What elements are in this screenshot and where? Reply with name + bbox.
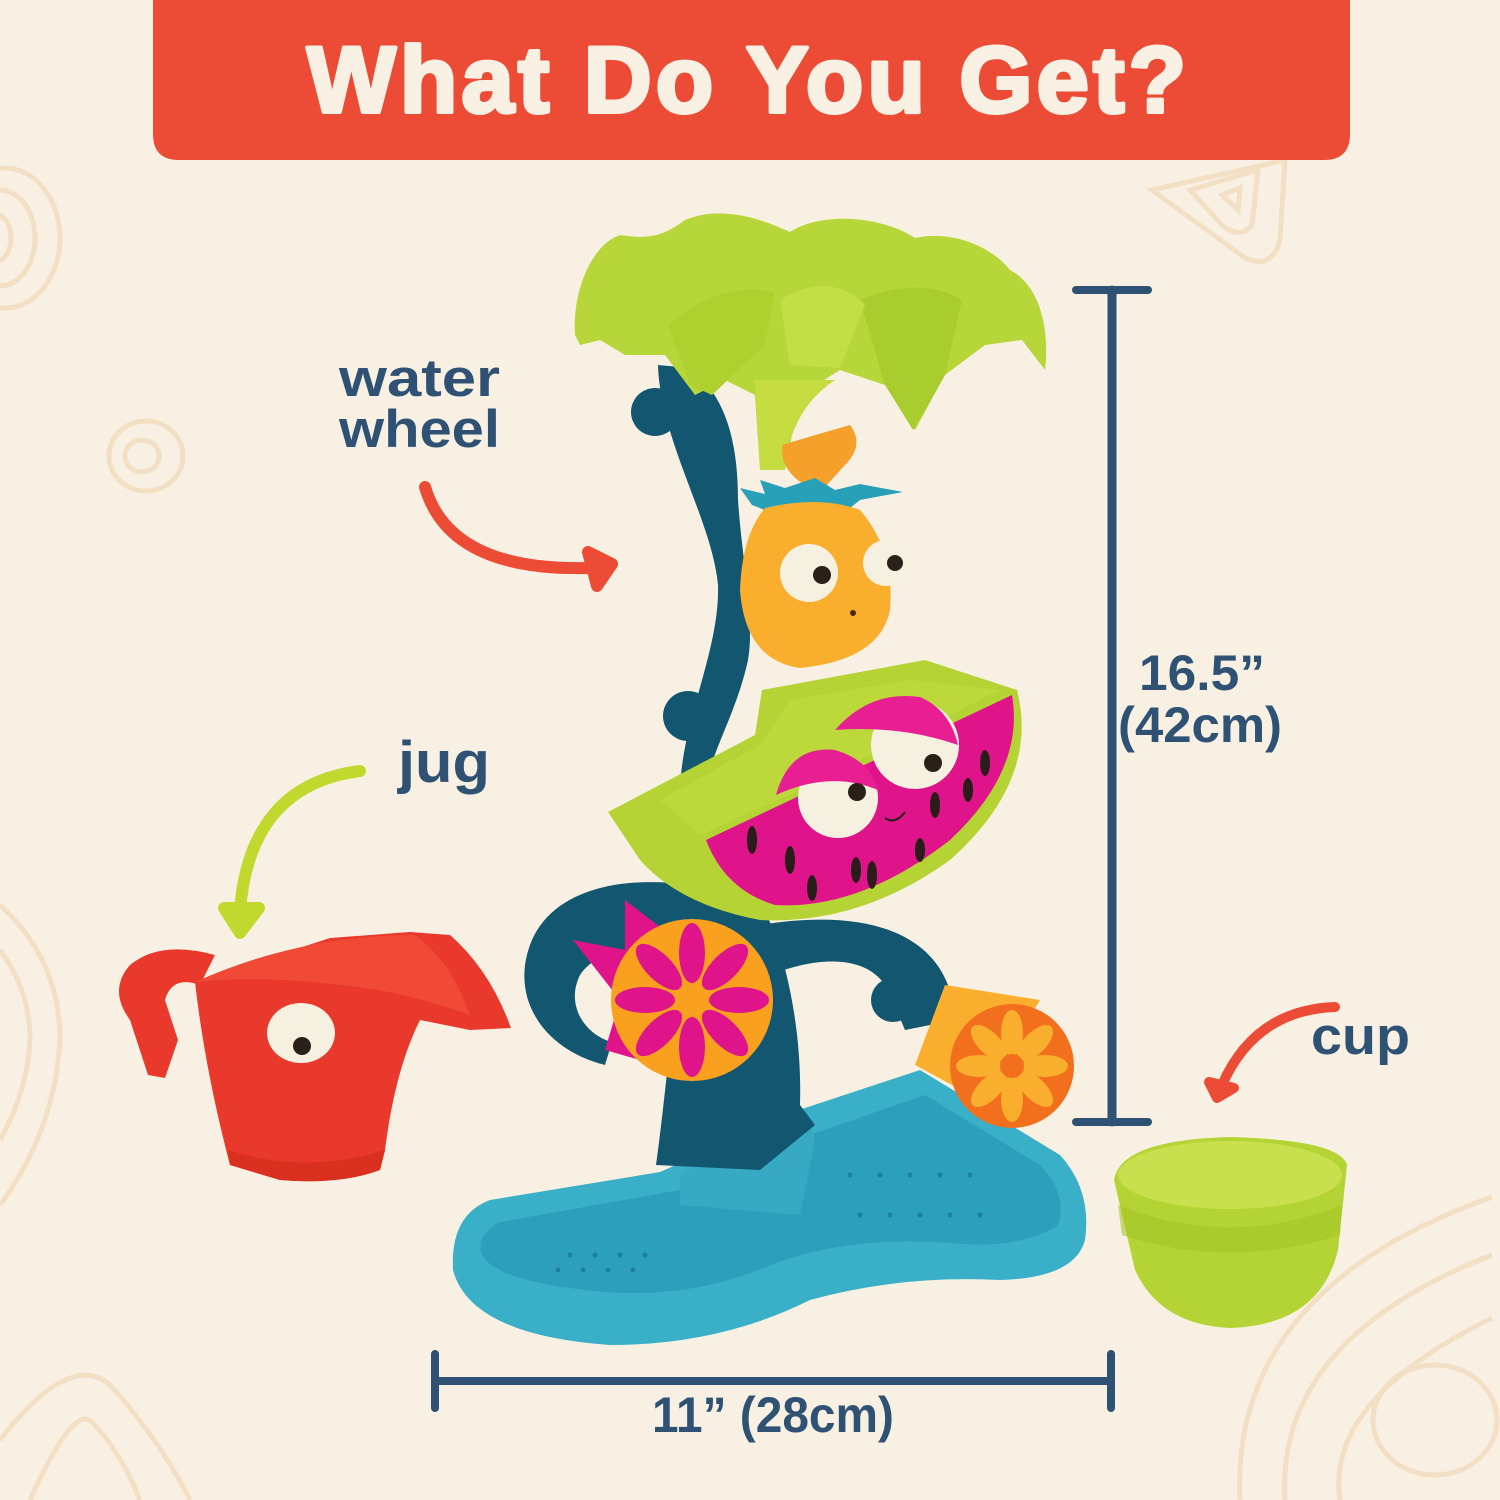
title: What Do You Get? [307,27,1186,132]
height label: 16.5” [1139,645,1265,701]
toy: watermelon [608,660,1022,920]
label: cup: cup [1311,1007,1410,1066]
toy: pineapple [740,478,909,668]
toy: jug [119,932,511,1181]
title banner [153,0,1350,160]
arrow: jug [224,771,360,933]
toy: banana [782,425,856,487]
height label [1118,645,1282,753]
toy: small wheel [915,985,1074,1128]
label: wheel: wheel [338,400,500,459]
height label: (42cm) [1118,697,1282,753]
height dimension [1076,290,1148,1122]
toy: large wheel [573,900,773,1081]
width label: 11” (28cm) [652,1387,894,1443]
width dimension [435,1354,1111,1408]
arrow: water wheel [425,487,612,586]
toy: trunk [524,365,948,1170]
arrow: cup [1209,1007,1335,1098]
toy: base tray [453,1070,1086,1345]
label: jug: jug [397,730,490,795]
toy: cup [1114,1137,1347,1328]
toy: palm leaves [575,213,1046,470]
label: water wheel: water [338,349,500,408]
